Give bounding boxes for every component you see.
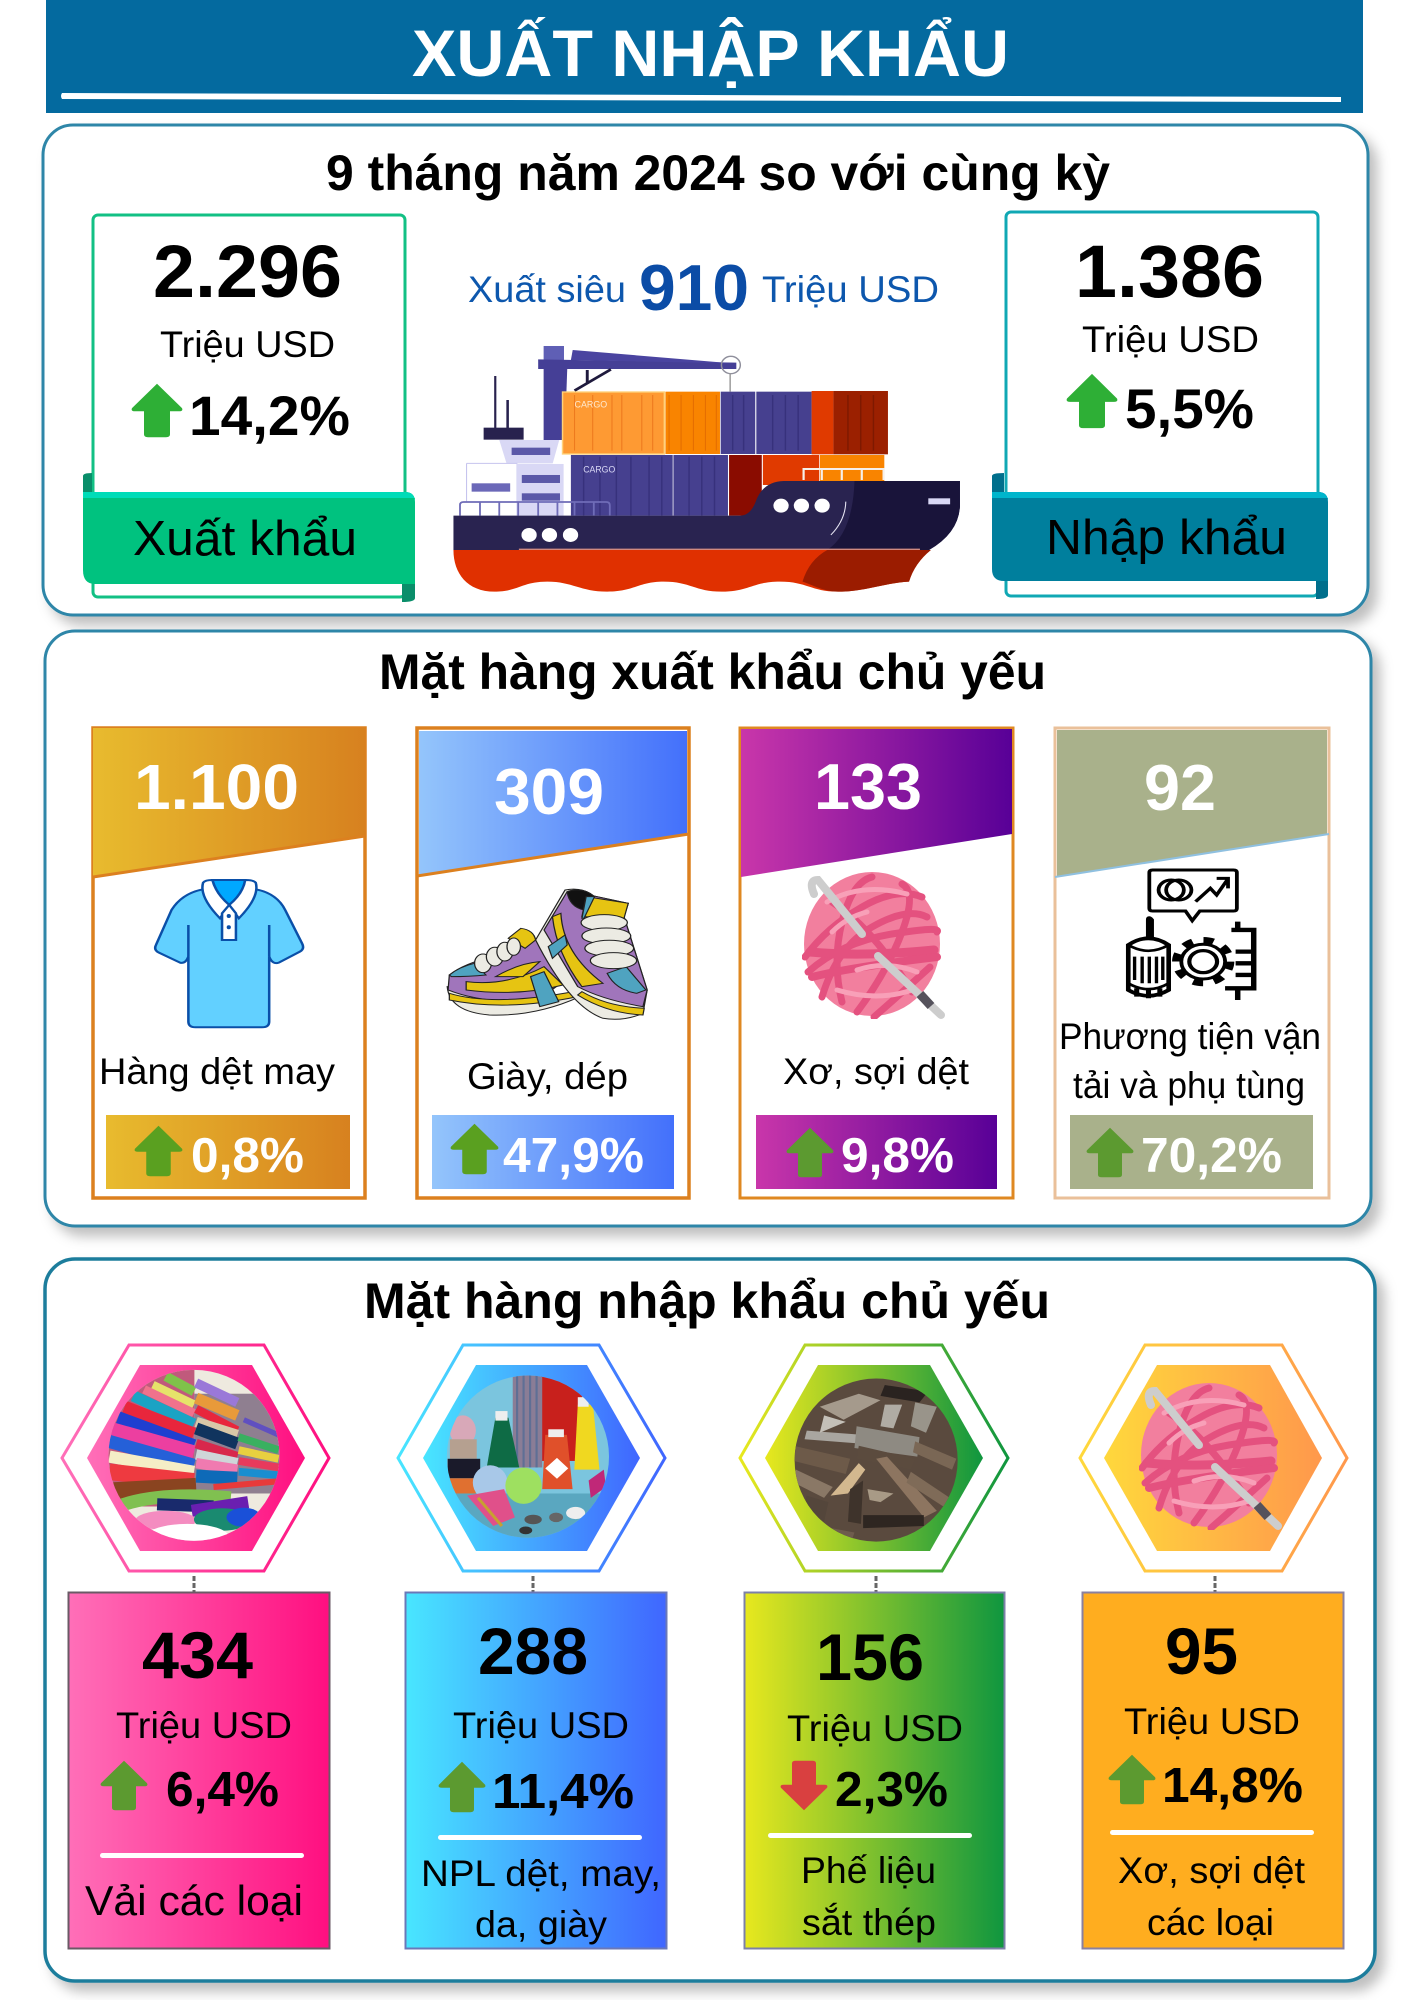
card: vehicles and parts bbox=[1055, 728, 1329, 1198]
item: textile materials: da, giày bbox=[475, 1903, 607, 1945]
item: fibers and yarn: 95 bbox=[1165, 1614, 1238, 1688]
card: footwear bbox=[417, 728, 689, 1198]
item: scrap steel: 2,3% bbox=[835, 1763, 948, 1817]
item: fibers and yarn: Triệu USD bbox=[1124, 1700, 1300, 1742]
icon: yarn ball bbox=[804, 872, 941, 1017]
export card: 14,2% bbox=[189, 384, 350, 447]
icon: polo shirt bbox=[155, 880, 303, 1027]
icon: cargo ship: CARGO bbox=[575, 400, 608, 410]
item: textile materials: Triệu USD bbox=[453, 1704, 629, 1746]
photo: threads and spools bbox=[446, 1376, 609, 1538]
trade surplus text: 910 bbox=[639, 251, 749, 324]
item: scrap steel: Triệu USD bbox=[787, 1707, 963, 1749]
card: fibers and yarn: Xơ, sợi dệt bbox=[783, 1050, 970, 1092]
title banner: XUẤT NHẬP KHẨU bbox=[412, 16, 1009, 90]
trade surplus text: Triệu USD bbox=[762, 268, 939, 310]
trade surplus text bbox=[468, 251, 939, 324]
import card: 1.386 bbox=[1075, 230, 1264, 313]
card: footwear: 309 bbox=[494, 755, 604, 828]
card: vehicles and parts: tải và phụ tùng bbox=[1073, 1064, 1305, 1106]
import card bbox=[992, 212, 1328, 599]
item: scrap steel: sắt thép bbox=[802, 1901, 936, 1943]
import card: 5,5% bbox=[1125, 377, 1254, 440]
card: textiles: 0,8% bbox=[191, 1129, 304, 1183]
icon: cargo ship: CARGO bbox=[583, 465, 616, 476]
card: footwear: 47,9% bbox=[503, 1129, 644, 1183]
item: textile materials bbox=[398, 1345, 666, 1948]
photo: fabric rolls bbox=[105, 1368, 283, 1550]
card: footwear: Giày, dép bbox=[467, 1055, 628, 1097]
item: textile materials: 11,4% bbox=[492, 1765, 634, 1819]
item: scrap steel: 156 bbox=[816, 1620, 924, 1694]
card: textiles: 1.100 bbox=[134, 751, 299, 823]
item: fibers and yarn bbox=[1080, 1345, 1347, 1948]
icon: yarn ball bbox=[1141, 1383, 1278, 1528]
item: fabrics: 434 bbox=[142, 1618, 253, 1692]
item: textile materials: NPL dệt, may, bbox=[421, 1852, 661, 1894]
card: fibers and yarn bbox=[740, 728, 1013, 1198]
item: fabrics: 6,4% bbox=[166, 1763, 279, 1817]
heading: 9 months: 9 tháng năm 2024 so với cùng kỳ bbox=[326, 145, 1110, 201]
title banner bbox=[46, 0, 1363, 113]
card: vehicles and parts: 70,2% bbox=[1141, 1129, 1282, 1183]
icon: vehicle parts and gear bbox=[1128, 870, 1254, 1000]
export card: Triệu USD bbox=[160, 323, 335, 365]
trade surplus text: Xuất siêu bbox=[468, 268, 626, 310]
panel: main export goods bbox=[45, 631, 1371, 1226]
export card: 2.296 bbox=[153, 230, 342, 313]
photo: scrap metal bbox=[792, 1376, 961, 1546]
heading: export goods: Mặt hàng xuất khẩu chủ yếu bbox=[379, 644, 1046, 700]
panel: 9 months overview bbox=[43, 125, 1368, 615]
item: fabrics: Triệu USD bbox=[116, 1704, 292, 1746]
item: fabrics bbox=[62, 1345, 330, 1948]
item: textile materials: 288 bbox=[478, 1614, 588, 1688]
item: scrap steel bbox=[740, 1345, 1008, 1948]
item: fibers and yarn: 14,8% bbox=[1162, 1759, 1303, 1813]
card: fibers and yarn: 9,8% bbox=[841, 1129, 954, 1183]
item: fabrics: Vải các loại bbox=[85, 1877, 303, 1924]
panel: main import goods bbox=[45, 1259, 1375, 1981]
item: fibers and yarn: Xơ, sợi dệt bbox=[1118, 1849, 1306, 1891]
import card: Triệu USD bbox=[1082, 318, 1259, 360]
heading: import goods: Mặt hàng nhập khẩu chủ yếu bbox=[364, 1273, 1050, 1329]
card: vehicles and parts: 92 bbox=[1144, 751, 1216, 824]
card: textiles bbox=[93, 728, 365, 1198]
card: textiles: Hàng dệt may bbox=[99, 1050, 335, 1092]
export card: Xuất khẩu bbox=[133, 511, 357, 566]
item: scrap steel: Phế liệu bbox=[801, 1849, 936, 1891]
icon: sneakers bbox=[447, 889, 647, 1019]
import card: Nhập khẩu bbox=[1046, 510, 1287, 565]
item: fibers and yarn: các loại bbox=[1147, 1901, 1274, 1943]
card: vehicles and parts: Phương tiện vận bbox=[1059, 1015, 1321, 1057]
export card bbox=[83, 215, 415, 602]
icon: cargo ship bbox=[453, 346, 960, 592]
card: fibers and yarn: 133 bbox=[814, 750, 922, 823]
